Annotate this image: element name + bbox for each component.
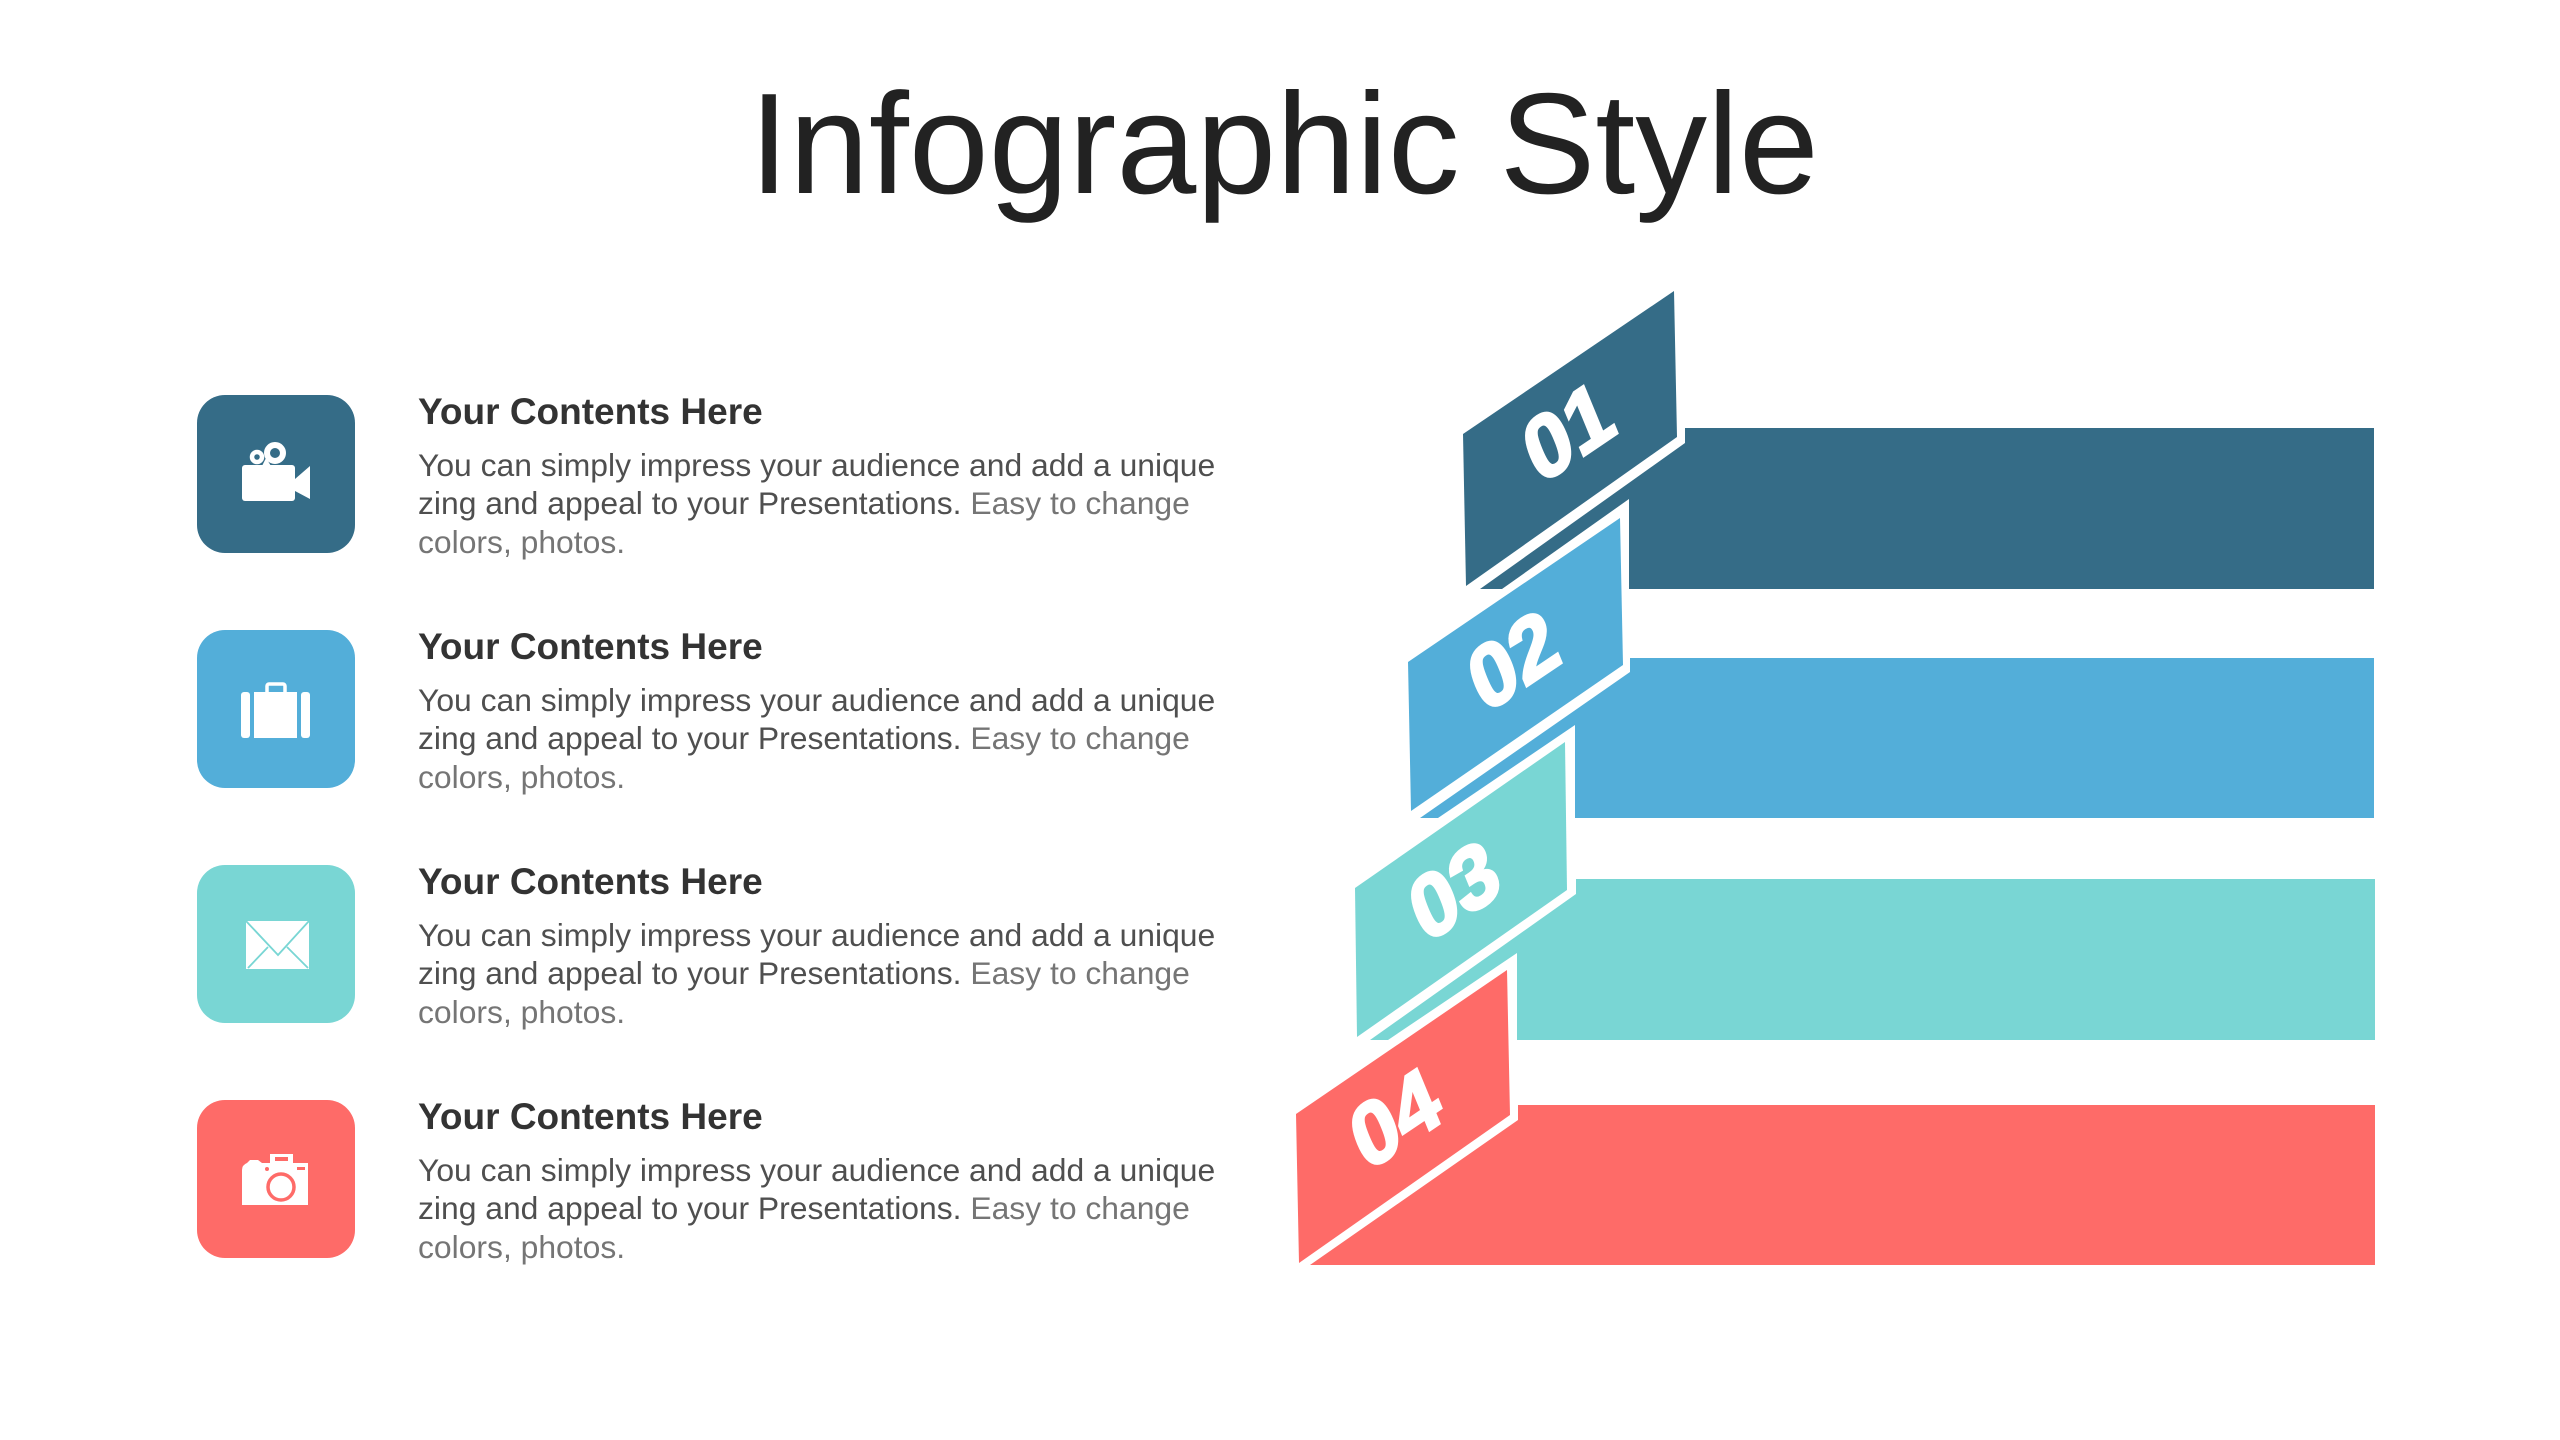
bar 04: 04 [1337,1048,1454,1190]
bar 01: 01 [1510,361,1626,503]
icon: video camera [197,395,355,553]
icon: envelope [197,865,355,1023]
title: Infographic Style [749,64,1819,224]
text block: zing and appeal to your Presentations. Easy to change [418,720,1190,756]
text block: colors, photos. [418,994,625,1030]
icon: camera [197,1100,355,1258]
panel: item 1 [197,391,1215,560]
text block: colors, photos. [418,759,625,795]
panel: item 4 [197,1096,1215,1265]
heading: Your Contents Here [418,861,763,902]
bar 04 [1296,970,2375,1265]
chart: stepped bars [1296,291,2375,1265]
text block: You can simply impress your audience and add a unique [418,917,1215,953]
text block: You can simply impress your audience and add a unique [418,447,1215,483]
bar 01 [1463,291,2374,589]
text block: zing and appeal to your Presentations. Easy to change [418,1190,1190,1226]
heading: Your Contents Here [418,626,763,667]
panel: item 3 [197,861,1215,1030]
text block: colors, photos. [418,1229,625,1265]
panel: item 2 [197,626,1215,795]
text block: zing and appeal to your Presentations. Easy to change [418,485,1190,521]
bar 02 [1408,518,2374,818]
heading: Your Contents Here [418,1096,763,1137]
bar 03 [1355,742,2375,1040]
text block: You can simply impress your audience and add a unique [418,1152,1215,1188]
heading: Your Contents Here [418,391,763,432]
bar 03: 03 [1396,820,1512,962]
bar 02: 02 [1455,590,1571,732]
icon: suitcase [197,630,355,788]
text block: zing and appeal to your Presentations. Easy to change [418,955,1190,991]
text block: colors, photos. [418,524,625,560]
text block: You can simply impress your audience and add a unique [418,682,1215,718]
